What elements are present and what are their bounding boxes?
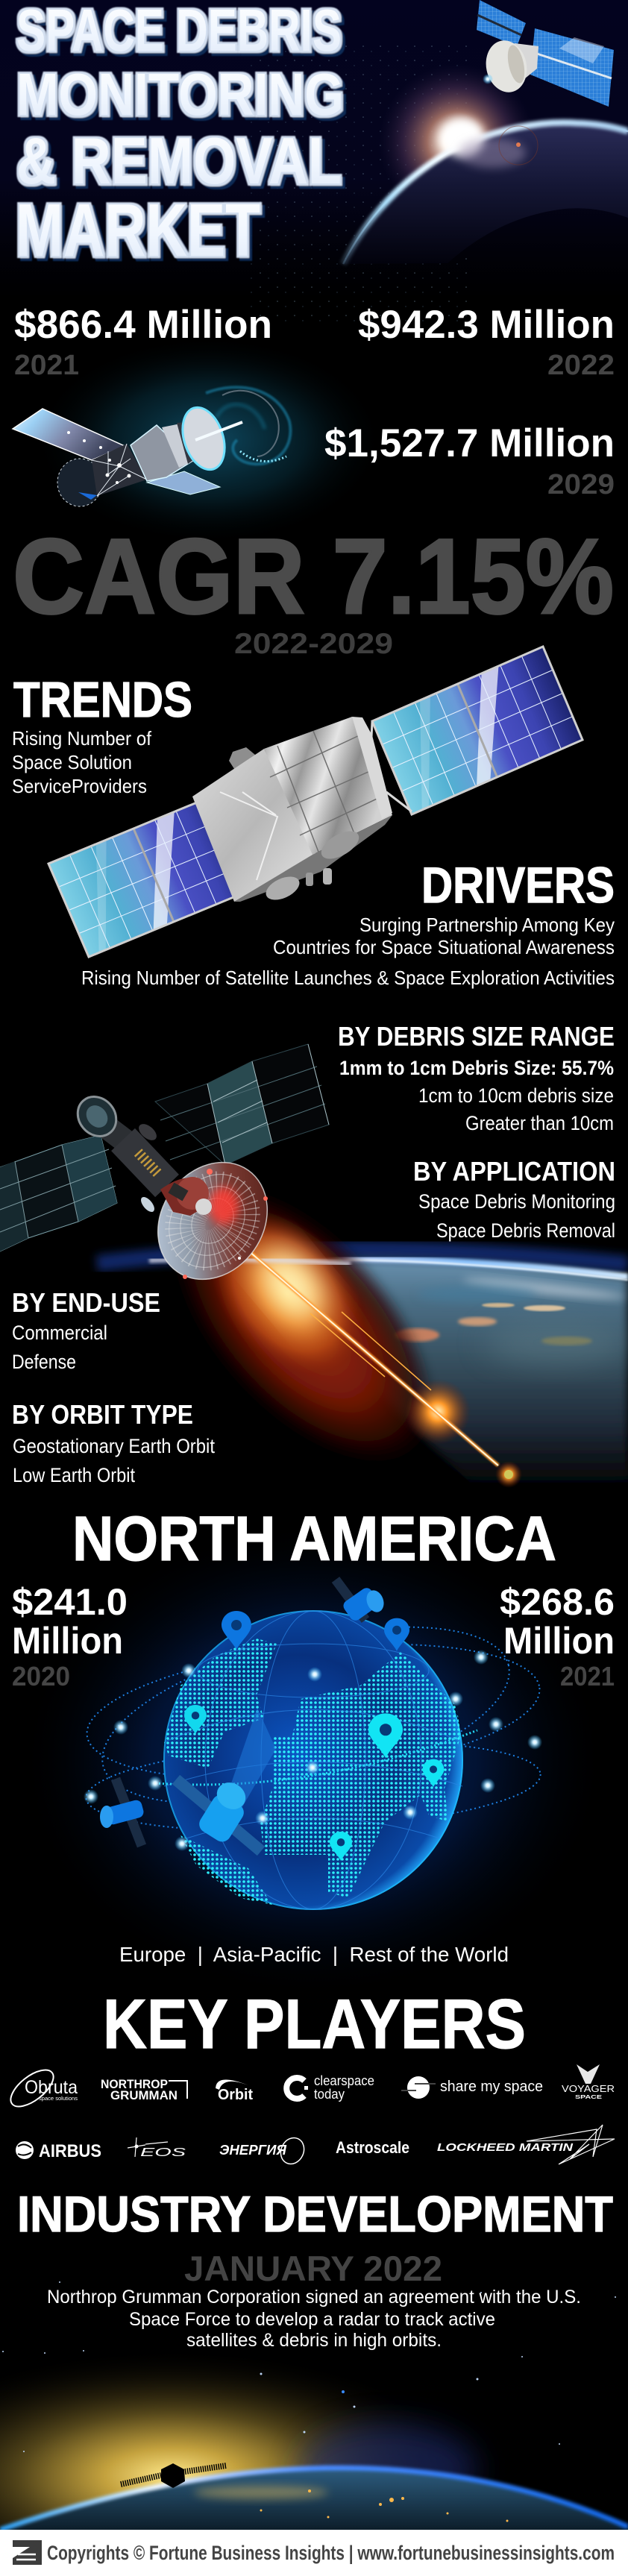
list [12, 1322, 107, 1373]
market value 2029: $1,527.7 Million [324, 421, 615, 465]
footer [0, 2530, 628, 2576]
heading: key players: KEY PLAYERS [103, 1985, 526, 2063]
text: development description [47, 2287, 581, 2351]
list: Geostationary Earth Orbit [13, 1435, 215, 1457]
list: Commercial [12, 1322, 107, 1344]
logo: Voyager Space [562, 2064, 615, 2100]
orbit nodes [84, 1650, 542, 1851]
logo: Airbus [16, 2141, 101, 2161]
earth [97, 1249, 628, 1490]
logo: Clearspace Today [286, 2073, 374, 2102]
illustration: satellite firing laser at debris over earth [0, 1044, 628, 1514]
text: drivers detail: Surging Partnership Among Key [359, 914, 615, 936]
market value 2029 [324, 421, 615, 500]
logo: Energia: ЭНЕРГИЯ [219, 2143, 287, 2158]
logo: Obruta [4, 2063, 78, 2114]
panel: market size [13, 303, 615, 544]
logo: Share My Space [401, 2076, 543, 2099]
value: north america 2020: 2020 [12, 1661, 70, 1691]
logo: EOS [128, 2137, 186, 2159]
logo: Share My Space: share my space [440, 2079, 543, 2095]
logo: Lockheed Martin: LOCKHEED MARTIN [437, 2141, 574, 2154]
text: development description: Northrop Grumman Corporation signed an agreement with the U.S. [47, 2287, 581, 2308]
heading: BY ORBIT TYPE [12, 1399, 193, 1430]
impact flare [405, 1379, 522, 1488]
heading: BY END-USE [12, 1287, 160, 1318]
illustration: silver satellite [48, 647, 583, 957]
logo: Voyager Space: SPACE [575, 2095, 602, 2100]
text: trends detail: Space Solution [12, 751, 132, 773]
value: north america 2021 [500, 1581, 615, 1691]
panel: trends [12, 672, 192, 797]
logo: Obruta: Obruta [25, 2077, 78, 2098]
text: drivers detail [81, 914, 615, 989]
list: Defense [12, 1351, 76, 1373]
panel: by orbit type [12, 1399, 215, 1486]
laser beam [248, 1251, 498, 1466]
panel: by debris size range [338, 1021, 615, 1134]
satellite solar panels [0, 1044, 329, 1251]
title: MONITORING [16, 61, 344, 128]
text: development description: Space Force to develop a radar to track active [129, 2309, 495, 2330]
market value 2022 [358, 303, 615, 381]
logo: Orbit [216, 2079, 253, 2103]
logo: Energia [219, 2134, 308, 2168]
laser glow [119, 1134, 486, 1514]
logo: Northrop Grumman: GRUMMAN [110, 2088, 178, 2102]
market value 2021 [14, 303, 272, 381]
market value 2021: $866.4 Million [14, 303, 272, 347]
text: other regions: Europe | Asia-Pacific | Rest of the World [119, 1943, 509, 1966]
text: trends detail [12, 727, 152, 797]
list: Low Earth Orbit [13, 1464, 135, 1486]
illustration: satellite over earth at sunrise [0, 2281, 628, 2576]
title: & REMOVAL [16, 124, 342, 198]
market value 2022: $942.3 Million [358, 303, 615, 347]
panel: header hero [0, 0, 628, 328]
value: north america 2020: Million [12, 1620, 123, 1662]
illustration: digital globe with orbits [19, 1521, 608, 1999]
logo: EOS: EOS [140, 2146, 186, 2159]
list [339, 1057, 614, 1134]
date: january 2022: JANUARY 2022 [184, 2249, 442, 2288]
logo: Clearspace Today: today [314, 2087, 345, 2102]
value: north america 2021: 2021 [560, 1661, 615, 1691]
text: trends detail: Rising Number of [12, 727, 152, 750]
value: north america 2021: $268.6 [500, 1581, 615, 1623]
logo: Airbus: AIRBUS [39, 2141, 101, 2161]
logo: Voyager Space: VOYAGER [562, 2083, 615, 2094]
panel: regional [12, 1504, 615, 1999]
market value 2029: 2029 [547, 469, 615, 500]
logo: Northrop Grumman: NORTHROP [101, 2077, 168, 2091]
CAGR headline: 2022-2029 [234, 628, 393, 660]
text: trends detail: ServiceProviders [12, 775, 147, 797]
panel: key players [4, 1985, 615, 2168]
panel: by application [413, 1156, 615, 1242]
logo: Lockheed Martin [437, 2125, 615, 2164]
panel: drivers [81, 857, 615, 989]
value: north america 2021: Million [503, 1620, 615, 1662]
energy rings [206, 387, 290, 464]
value: north america 2020: $241.0 [12, 1581, 128, 1623]
heading: trends: TRENDS [13, 672, 192, 728]
logo: Clearspace Today: clearspace [314, 2073, 374, 2088]
panel: industry development [0, 2186, 628, 2576]
market value 2022: 2022 [547, 350, 615, 381]
illustration: communications satellite [477, 0, 614, 107]
title: MARKET [16, 189, 260, 272]
heading: north america: NORTH AMERICA [72, 1504, 556, 1574]
illustration: wireframe satellite [13, 336, 384, 544]
satellite body and dish [70, 1089, 289, 1301]
text: development description: satellites & debris in high orbits. [186, 2330, 442, 2351]
logo: Northrop Grumman [101, 2077, 187, 2102]
map pins [184, 1611, 444, 1861]
logo: Fortune Business Insights [13, 2540, 42, 2565]
list [13, 1435, 215, 1486]
logo: Obruta: space solutions [39, 2096, 78, 2102]
orbiting satellites [100, 1580, 386, 1851]
list [418, 1190, 615, 1242]
market value 2021: 2021 [14, 350, 79, 381]
illustration: planet with sunrise [343, 63, 628, 264]
title [16, 0, 344, 272]
value: north america 2020 [12, 1581, 128, 1691]
logo: Orbit: Orbit [218, 2087, 253, 2103]
logo: Astroscale: Astroscale [336, 2138, 409, 2157]
panel: by end-use [12, 1287, 160, 1373]
